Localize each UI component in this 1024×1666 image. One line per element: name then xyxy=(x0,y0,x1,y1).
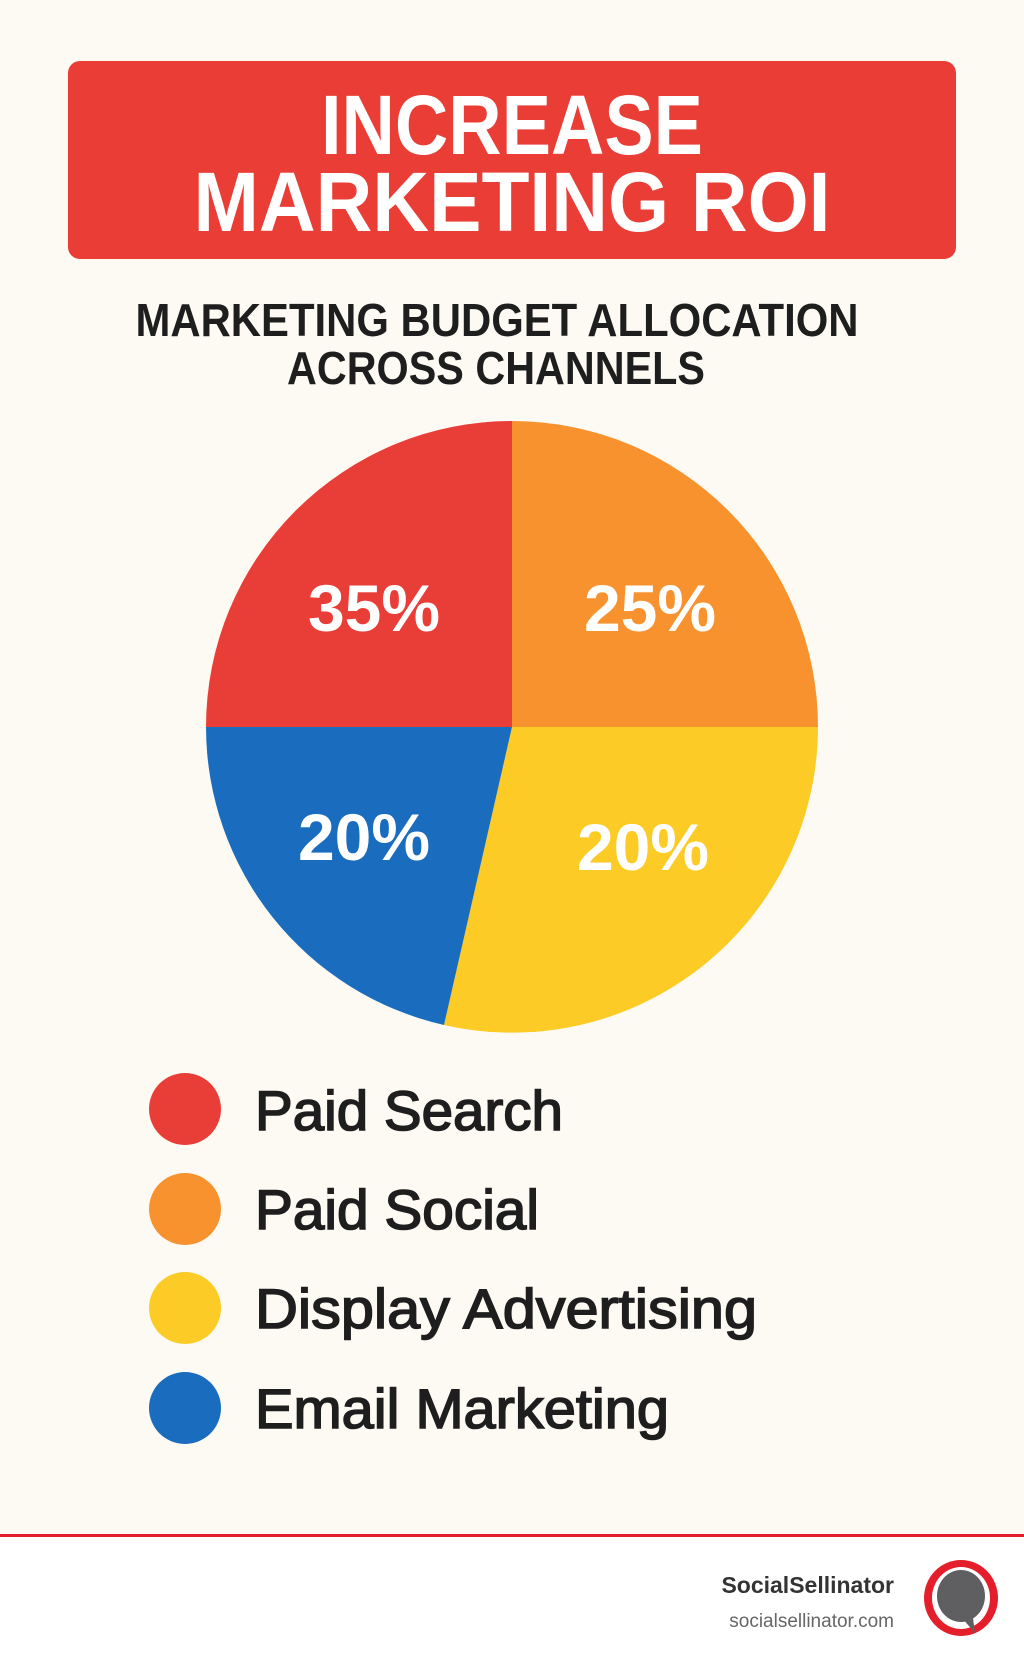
legend item: display advertising xyxy=(149,1272,757,1344)
footer brand text: SocialSellinator xyxy=(721,1572,894,1598)
label 20% display: 20% xyxy=(577,810,709,884)
title banner: MARKETING ROI xyxy=(194,155,830,249)
slice: display advertising xyxy=(444,727,818,1033)
footer brand text xyxy=(721,1572,894,1632)
subtitle: MARKETING BUDGET ALLOCATION xyxy=(136,294,858,346)
title banner xyxy=(68,61,956,259)
legend item: paid social: Paid Social xyxy=(255,1178,539,1241)
legend item: paid search xyxy=(149,1073,563,1145)
slice: email marketing xyxy=(206,727,512,1025)
legend item: display advertising: Display Advertising xyxy=(255,1277,757,1340)
legend item: paid search: Paid Search xyxy=(255,1079,563,1142)
subtitle xyxy=(136,294,858,394)
slice: paid social xyxy=(512,421,818,727)
icon: logo xyxy=(924,1560,998,1636)
legend xyxy=(149,1073,757,1444)
footer brand text: socialsellinator.com xyxy=(729,1611,894,1632)
legend item: email marketing: Email Marketing xyxy=(255,1377,669,1440)
label 35%: 35% xyxy=(308,571,440,645)
label 20% email: 20% xyxy=(298,800,430,874)
subtitle: ACROSS CHANNELS xyxy=(287,342,705,394)
slice: paid search xyxy=(206,421,512,727)
label 25%: 25% xyxy=(584,571,716,645)
title banner: INCREASE xyxy=(321,78,703,172)
legend item: email marketing xyxy=(149,1372,669,1444)
legend item: paid social xyxy=(149,1173,539,1245)
pie chart xyxy=(206,421,818,1033)
